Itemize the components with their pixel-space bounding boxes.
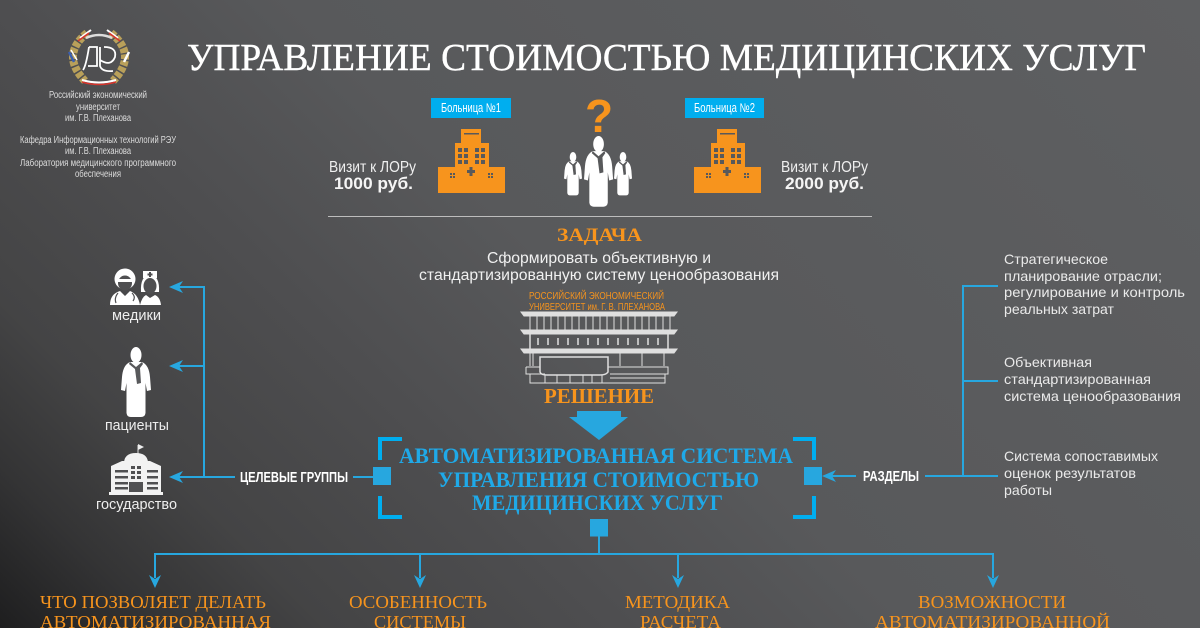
section 1 text xyxy=(1004,251,1185,317)
bottom heading 3: МЕТОДИКА xyxy=(625,592,730,612)
label: state: государство xyxy=(96,497,177,513)
heading: task: ЗАДАЧА xyxy=(557,225,642,246)
task text: Сформировать объективную и xyxy=(487,250,711,267)
hospital 2 label: Больница №2 xyxy=(694,101,755,115)
label: medics: медики xyxy=(112,308,161,324)
section 3 text: оценок результатов xyxy=(1004,465,1136,481)
bottom heading 2 xyxy=(349,592,487,628)
section 1 text: реальных затрат xyxy=(1004,301,1115,317)
icon: hospital 1 xyxy=(438,129,505,193)
text: university and department: им. Г.В. Плеханова xyxy=(65,146,131,157)
university name: УНИВЕРСИТЕТ им. Г. В. ПЛЕХАНОВА xyxy=(529,302,665,313)
hospital 1 price: Визит к ЛОРу xyxy=(329,159,416,176)
connectors: sections xyxy=(822,286,998,482)
bottom heading 4 xyxy=(875,592,1110,628)
university name: РОССИЙСКИЙ ЭКОНОМИЧЕСКИЙ xyxy=(529,289,664,302)
bottom heading 2: ОСОБЕННОСТЬ xyxy=(349,592,487,612)
question mark: ? xyxy=(585,90,613,142)
section 2 text: система ценообразования xyxy=(1004,388,1181,404)
section 1 text: Стратегическое xyxy=(1004,251,1108,267)
label: target groups: ЦЕЛЕВЫЕ ГРУППЫ xyxy=(240,469,348,486)
text: university and department: обеспечения xyxy=(75,168,121,180)
hospital 2 price: Визит к ЛОРу xyxy=(781,159,868,176)
section 2 text: стандартизированная xyxy=(1004,371,1151,387)
section 3 text: работы xyxy=(1004,482,1052,498)
icon: patient xyxy=(121,347,151,417)
icon: university building xyxy=(521,312,677,383)
arrow: solution down xyxy=(569,411,628,440)
icon: hospital 2 xyxy=(694,129,761,193)
arrows: target groups xyxy=(169,281,373,483)
system title: УПРАВЛЕНИЯ СТОИМОСТЬЮ xyxy=(438,467,759,492)
section 2 text: Объективная xyxy=(1004,354,1092,370)
logo: university emblem xyxy=(69,30,129,84)
section 3 text xyxy=(1004,448,1158,498)
system title: АВТОМАТИЗИРОВАННАЯ СИСТЕМА xyxy=(399,443,793,468)
text: university and department: университет xyxy=(76,102,120,113)
section 3 text: Система сопоставимых xyxy=(1004,448,1158,464)
hospital 2 price xyxy=(781,159,868,193)
system title frame xyxy=(373,439,822,536)
bottom heading 1: ЧТО ПОЗВОЛЯЕТ ДЕЛАТЬ xyxy=(40,592,266,612)
hospital 1 price xyxy=(329,159,416,193)
system title: МЕДИЦИНСКИХ УСЛУГ xyxy=(472,490,723,515)
connectors: bottom tree xyxy=(149,536,999,588)
icon: state building xyxy=(109,444,163,495)
label: sections: РАЗДЕЛЫ xyxy=(863,468,919,485)
label: patients: пациенты xyxy=(105,418,169,434)
icon: medics xyxy=(110,268,161,305)
task text xyxy=(419,250,779,284)
bottom heading 1 xyxy=(40,592,271,628)
section 1 text: регулирование и контроль xyxy=(1004,284,1185,300)
university name xyxy=(529,289,665,313)
bottom heading 4: ВОЗМОЖНОСТИ xyxy=(918,592,1066,612)
hospital 1 label xyxy=(431,98,511,118)
hospital 1 label: Больница №1 xyxy=(441,101,501,115)
hospital 2 price: 2000 руб. xyxy=(785,174,864,193)
section 2 text xyxy=(1004,354,1181,404)
title: УПРАВЛЕНИЕ СТОИМОСТЬЮ МЕДИЦИНСКИХ УСЛУГ xyxy=(187,37,1146,79)
task text: стандартизированную систему ценообразования xyxy=(419,267,779,284)
hospital 1 price: 1000 руб. xyxy=(334,174,413,193)
text: university and department: им. Г.В. Плеханова xyxy=(65,113,131,124)
text: university and department: Российский экономический xyxy=(49,90,147,101)
section 1 text: планирование отрасли; xyxy=(1004,268,1162,284)
system title xyxy=(399,443,793,515)
text: university and department xyxy=(20,90,176,180)
bottom heading 3 xyxy=(625,592,730,628)
heading: solution: РЕШЕНИЕ xyxy=(544,384,654,408)
hospital 2 label xyxy=(685,98,764,118)
text: university and department: Лаборатория медицинского программного xyxy=(20,157,176,169)
icon: group of patients xyxy=(564,136,632,207)
text: university and department: Кафедра Информационных технологий РЭУ xyxy=(20,134,176,146)
